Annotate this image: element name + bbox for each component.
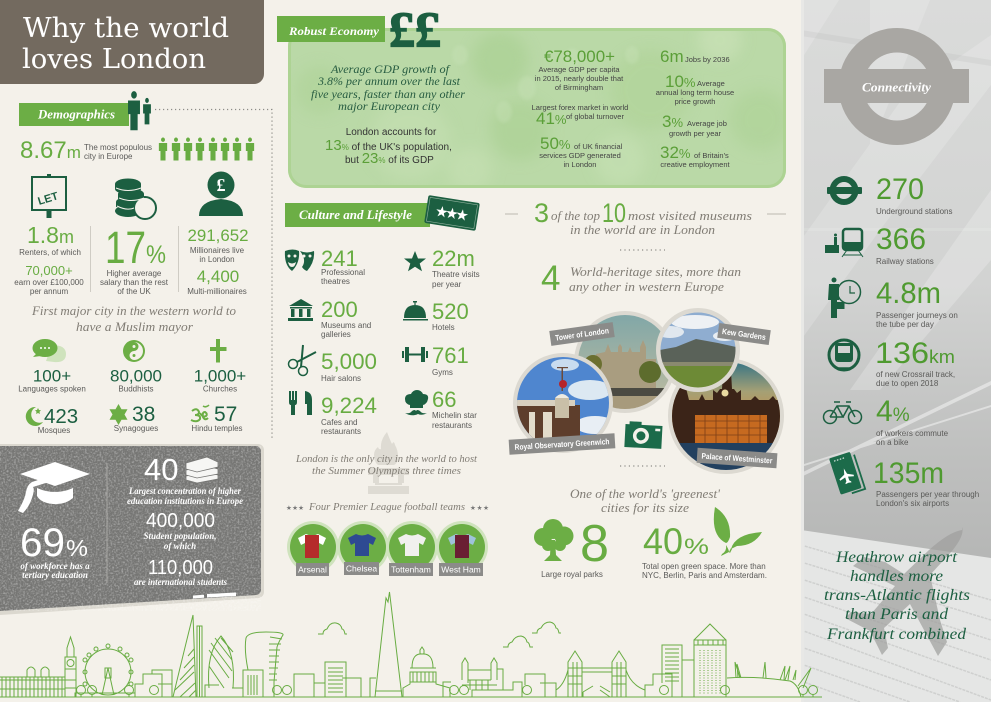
label: palace of westminster [697,448,777,468]
stat: churches: Churches [203,384,237,394]
icon: museum [288,299,313,321]
section: museums and heritage [505,198,786,580]
stat: museums: galleries [321,330,351,339]
text: gdp growth: Average GDP growth of [330,64,451,76]
text: premier league heading: ★★★ [470,504,489,512]
stat: institutions: Largest concentration of higher [128,486,241,496]
icon: theatre masks [285,250,314,271]
stat: theatres: theatres [321,277,350,286]
landmark: the shard [370,592,402,697]
label: kew gardens: Kew Gardens [722,327,767,342]
stat: international students: are international students [134,577,227,587]
text: gdp growth: five years, faster than any other [311,89,466,101]
stats column: jobs and growth: price growth [675,97,715,106]
stats column: gdp per capita, forex, financial services: Average GDP per capita [538,65,620,74]
text: olympics [295,453,478,477]
title block [0,0,264,84]
football team: arsenal [287,521,339,576]
stat: salary: % [146,241,166,269]
stat: student population: 400,000 [146,510,215,532]
text: olympics: London is the only city in the world to host [295,453,478,465]
stat: theatres [321,246,365,286]
stat: institutions: education institutions in Europe [127,496,243,506]
stat: renters [14,222,84,296]
icon: chef hat and moustache [405,390,428,415]
text: heathrow: handles more [850,568,943,585]
football team: west ham: West Ham [441,564,481,574]
icon: tube roundel [827,176,862,205]
crowd photo panel [288,18,790,192]
landmark: tower of london [443,658,532,697]
stat: bike commuters: 4% [876,395,910,428]
text: heathrow: trans-Atlantic flights [824,587,970,604]
stat: renters: earn over £100,000 [14,278,84,287]
stats column: jobs and growth: 6m [660,47,684,66]
section: demographics [14,91,272,440]
icon: millionaire [199,172,243,216]
stat: michelin: restaurants [432,421,472,430]
text: heathrow: Frankfurt combined [826,626,966,643]
stat: salary [100,222,169,296]
stat: open green space: 40 [643,521,683,562]
stats column: gdp per capita, forex, financial services: 50% [540,134,571,153]
culture heading banner [285,203,430,227]
stats column: gdp per capita, forex, financial services: of UK financial [574,142,623,151]
stat: salary: of the UK [117,287,151,296]
label: tower of london [549,322,615,346]
text: greenest: cities for its size [601,500,689,515]
icon: ticket with stars [424,195,480,231]
office blocks [294,662,361,697]
text: greenest: One of the world's 'greenest' [570,486,720,501]
stat: workforce [20,521,90,580]
stat: cafes: restaurants [321,427,361,436]
stat: international students [134,557,227,587]
stats column: gdp per capita, forex, financial services: of global turnover [566,112,624,121]
landmark: gherkin [205,636,243,697]
stat: railway stations: 366 [876,223,926,256]
stat: cafes [321,393,377,436]
stat: royal parks [541,515,609,579]
photo: tower of london [574,311,672,413]
text: greenest [570,486,720,515]
text: heathrow [824,549,970,643]
icon: railway [825,229,863,257]
stats column: gdp per capita, forex, financial services: Largest forex market in world [532,103,628,112]
clouds [503,622,561,647]
text: premier league heading: ★★★ [286,504,304,512]
trees [272,686,292,694]
stat: millionaires: Multi-millionaires [187,287,247,296]
icon: coins [115,178,156,219]
text: gdp growth [311,64,466,113]
text: heathrow: Heathrow airport [835,549,958,566]
text: gdp growth: 3.8% per annum over the last [317,76,461,88]
icon: millionaire: £ [216,175,226,195]
icon: commuter and clock [828,278,860,318]
stats column: jobs and growth: growth per year [669,129,722,138]
stat: michelin: Michelin star [432,411,477,420]
section: culture and lifestyle [285,195,489,576]
label: palace of westminster: Palace of Westminster [701,452,773,465]
stats column: gdp per capita, forex, financial services: €78,000+ [544,47,615,66]
stat: passenger journeys: Passenger journeys on [876,311,958,320]
icon: star [404,251,426,271]
stat: workforce: tertiary education [22,570,88,580]
icon: faint plane [845,527,963,656]
stat: cafes: Cafes and [321,418,357,427]
stat: open green space: Total open green space. More than [642,562,766,571]
stat: theatre visits: Theatre visits [432,270,480,279]
stat: student population: Student population, [143,531,217,541]
stat: hair salons: Hair salons [321,374,361,383]
icon: leaves [714,507,762,556]
stats column: jobs and growth: of Britain's [694,151,729,160]
city blocks [135,670,172,697]
landmark: canary wharf [645,624,730,697]
text: muslim mayor [31,303,236,334]
stats column: gdp per capita, forex, financial services: 41% [536,109,567,128]
stats column: gdp per capita, forex, financial services: in 2015, nearly double that [535,74,624,83]
stats column: gdp per capita, forex, financial services [532,47,628,169]
stat: hindu temples: 57 [214,403,237,426]
stat: theatres: Professional [321,268,365,277]
icon: dumbbell [402,347,428,362]
landmark: o2 arena [727,662,811,697]
text: muslim mayor: First major city in the western world to [31,303,236,318]
stat: mosques: 423 [44,405,78,428]
text: world heritage: any other in western Europe [569,279,724,294]
text: share of population and gdp [325,127,452,167]
stat: underground stations [876,173,952,216]
stats column: jobs and growth: Average [697,79,725,88]
stat: crossrail: due to open 2018 [876,379,939,388]
icon: olympic torch [368,432,409,494]
stat: hindu temples [191,403,243,433]
text: top ten museums [534,198,752,237]
stat: millionaires [187,226,248,296]
icon: speech bubbles [32,339,66,362]
stat: workforce: % [66,535,88,561]
icon: tree [534,519,574,561]
stat: open green space [642,521,767,580]
stat: hindu temples: Hindu temples [191,424,243,433]
icon: om [191,405,209,421]
stat: millionaires: 4,400 [197,267,239,286]
stat: bike commuters [876,395,949,447]
icon: bicycle [824,402,862,424]
icon: yin yang [123,340,145,362]
stat: theatre visits [432,246,480,289]
stat: workforce: of workforce has a [20,561,90,571]
panel: blackboard education [0,444,264,615]
stat: synagogues: 38 [132,403,155,426]
text: top ten museums: most visited museums [628,208,752,223]
stat: buddhists: 80,000 [110,366,162,386]
stat: workforce: 69 [20,521,65,565]
trees by the eye [76,686,134,697]
text: heathrow: than Paris and [845,606,948,623]
icon: crossrail train [829,340,859,370]
stat: renters: 70,000+ [25,263,73,278]
stat: crossrail: of new Crossrail track, [876,370,955,379]
landmark: houses of parliament [0,667,65,697]
icon: books [186,457,218,483]
stats column: jobs and growth: Average job [687,119,727,128]
icon: graduation cap [18,462,90,513]
text: world heritage: World-heritage sites, more than [570,264,741,279]
stat: student population: of which [164,541,196,551]
text: world heritage: 4 [541,259,560,298]
economy heading banner [277,16,385,42]
stat: hotels: 520 [432,299,469,324]
culture heading banner: Culture and Lifestyle [299,207,412,222]
stat: mosques [38,405,78,435]
stat: bike commuters: of workers commute [876,429,949,438]
stat: michelin [432,387,477,430]
panel: connectivity background [801,0,991,702]
label: royal observatory greenwich: Royal Observatory Greenwich [514,437,610,452]
stat: crossrail: 136km [875,337,955,370]
stat: population: 8.67m [20,137,81,164]
text: share of population and gdp: London accounts for [346,127,437,138]
stats column: jobs and growth: 32% [660,143,691,162]
icon: scissors [288,345,316,376]
stats column: jobs and growth: 3% [662,112,683,131]
football team: chelsea: Chelsea [346,564,377,574]
stat: mosques: Mosques [38,426,70,435]
football team: arsenal: Arsenal [298,564,327,574]
stat: cafes: 9,224 [321,393,377,418]
stat: international students: 110,000 [148,557,213,579]
stat: gyms: Gyms [432,368,453,377]
stat: crossrail [875,337,955,388]
icon: crescent [26,407,43,426]
text: world heritage [541,259,741,298]
stats column: jobs and growth: creative employment [660,160,731,169]
stat: millionaires: 291,652 [188,226,248,245]
icon: star of david [110,404,128,425]
stat: open green space: % [684,534,709,559]
stat: passenger journeys: 4.8m [876,277,941,310]
stat: underground stations: Underground stations [876,207,952,216]
icon: to-let sign: LET [36,190,60,208]
stat: royal parks: 8 [580,515,609,573]
label: kew gardens [717,323,771,345]
stat: institutions [127,452,243,506]
stat: millionaires: Millionaires live [190,246,245,255]
panel: robust economy [277,1,790,192]
photo: kew gardens [656,308,740,392]
football team: tottenham: Tottenham [391,564,431,574]
landmark: walkie talkie [243,632,283,697]
stat: airport passengers: 135m [873,457,944,490]
stat: theatre visits: 22m [432,246,475,271]
photo: royal observatory greenwich [513,353,615,455]
stat: underground stations: 270 [876,173,924,206]
photo: palace of westminster [668,358,784,474]
text: gdp growth: major European city [338,101,441,113]
text: share of population and gdp: 13% of the UK's population, [325,137,452,154]
trees [795,686,822,697]
skyline illustration [0,592,822,697]
text: share of population and gdp: but 23% of its GDP [345,150,434,167]
icon: two people [128,91,151,130]
icon: camera [624,421,663,449]
stats column: gdp per capita, forex, financial services: in London [564,160,596,169]
chalk pieces [193,592,236,598]
economy heading banner: Robust Economy [288,24,380,38]
stat: museums [321,297,371,339]
stat: population: The most populous [84,143,152,152]
icon: underground roundel heading [824,28,969,145]
stats column: jobs and growth: annual long term house [656,88,734,97]
football team: west ham [436,521,488,576]
football team: chelsea [337,521,389,575]
stat: passenger journeys [876,277,958,329]
stat: open green space: NYC, Berlin, Paris and Amsterdam. [642,571,767,580]
stat: renters: per annum [30,287,68,296]
icon: row of people [159,138,254,160]
landmark: big ben [65,637,76,697]
stat: passenger journeys: the tube per day [876,320,934,329]
stats column: jobs and growth: Jobs by 2036 [685,55,730,64]
stat: churches: 1,000+ [194,366,246,386]
stat: student population [143,510,217,551]
stat: population: city in Europe [84,152,133,161]
title block: loves London [22,44,206,75]
stat: airport passengers [873,457,979,508]
stats column: jobs and growth [656,47,734,169]
landmark: heron tower [173,615,202,697]
demographics heading banner [19,103,129,126]
icon: to-let sign [32,174,66,218]
icon: service bell [403,301,428,320]
stat: hair salons: 5,000 [321,349,377,374]
cloud [318,623,347,634]
stat: salary: 17 [105,222,146,273]
stat: millionaires: in London [199,255,235,264]
text: top ten museums: 10 [602,198,626,228]
stat: museums: Museums and [321,321,371,330]
label: royal observatory greenwich [509,433,615,455]
text: muslim mayor: have a Muslim mayor [76,319,194,334]
label: tower of london: Tower of London [555,326,610,343]
stat: salary: Higher average [107,269,162,278]
stat: renters: 1.8m [27,222,74,248]
text: olympics: the Summer Olympics three times [312,465,461,477]
stat: hotels: Hotels [432,323,455,332]
landmark: st pauls [403,647,450,697]
stat: synagogues [114,403,158,433]
stats column: jobs and growth: 10% [665,72,696,91]
icon: cutlery [289,391,312,415]
title: Why the world [23,13,229,44]
stat: airport passengers: London's six airports [876,499,949,508]
stat: royal parks: Large royal parks [541,570,603,579]
stat: renters: Renters, of which [19,248,81,257]
text: top ten museums: of the top [551,208,600,223]
stat: theatre visits: per year [432,280,462,289]
stat: bike commuters: on a bike [876,438,909,447]
stats column: gdp per capita, forex, financial services: of Birmingham [555,83,603,92]
stat: michelin: 66 [432,387,456,412]
panel: connectivity [824,28,979,656]
stat: buddhists: Buddhists [118,384,154,394]
stat: institutions: 40 [144,452,178,487]
text: premier league heading: Four Premier League football teams [308,501,465,513]
football team: tottenham [386,521,438,576]
stat: population [20,137,152,164]
stat: gyms: 761 [432,343,469,368]
icon: ticket with stars: ★★★ [434,202,470,225]
icon: underground roundel heading: Connectivity [862,80,931,94]
landmark: london eye [75,644,135,697]
text: top ten museums: 3 [534,198,549,228]
icon: cross [210,339,226,362]
stat: airport passengers: Passengers per year through [876,490,979,499]
stat: synagogues: Synagogues [114,424,158,433]
stat: salary: salary than the rest [100,278,169,287]
stat: theatres: 241 [321,246,358,271]
icon: pound signs: ££ [389,1,441,57]
stat: railway stations: Railway stations [876,257,934,266]
demographics heading banner: Demographics [37,106,115,122]
text: top ten museums: in the world are in London [570,222,715,237]
office blocks [525,674,556,697]
landmark: tower bridge [556,651,645,697]
stat: languages [18,366,86,394]
stat: languages: Languages spoken [18,384,86,394]
stat: museums: 200 [321,297,358,322]
stats column: gdp per capita, forex, financial services: services GDP generated [539,151,621,160]
stat: languages: 100+ [33,366,71,386]
icon: plane ticket [829,451,865,497]
stat: railway stations [876,223,934,266]
